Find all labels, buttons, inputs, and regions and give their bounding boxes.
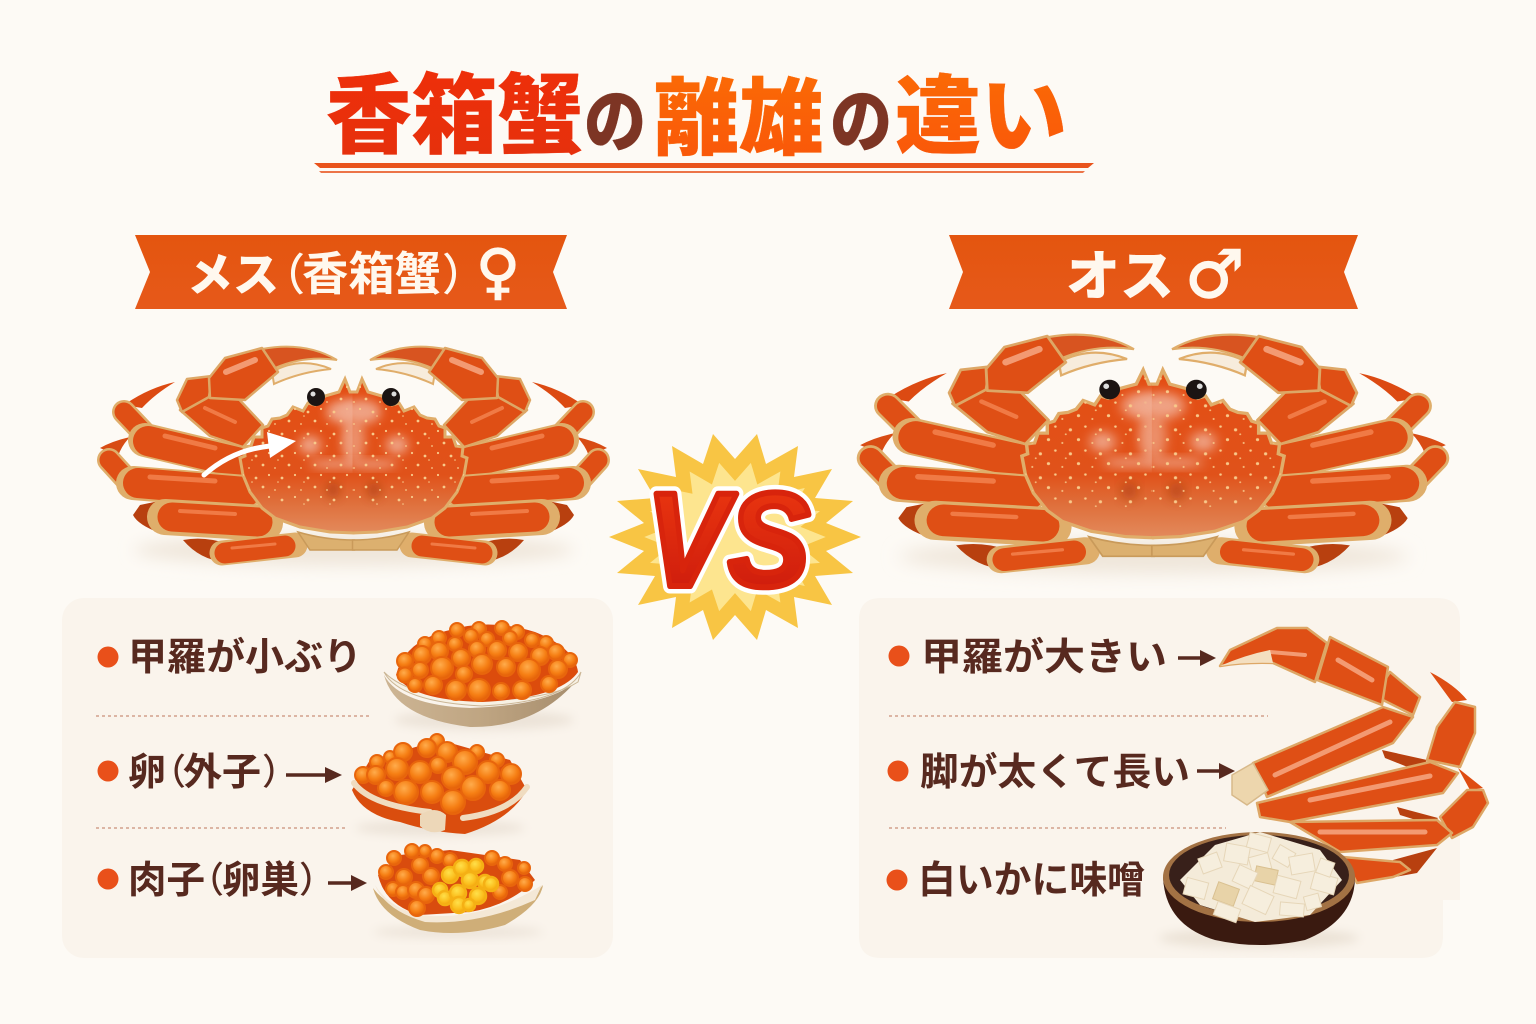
trait: outer eggs: （	[150, 751, 186, 792]
trait: outer eggs: ）	[262, 751, 298, 792]
crab: male	[860, 335, 1446, 574]
food: crab legs and claw	[1220, 628, 1488, 883]
trait: large carapace	[888, 637, 1216, 679]
trait: inner ovary	[98, 859, 367, 902]
food: white miso in bowl	[1159, 832, 1359, 948]
banner: male: ♂	[1185, 236, 1244, 313]
crab: female	[100, 347, 607, 566]
title: 違い	[895, 69, 1067, 165]
banner: female	[135, 235, 567, 309]
arrow: to carapace	[204, 432, 296, 475]
trait: inner ovary: ）	[299, 859, 335, 900]
food: ovary in shell	[373, 844, 543, 938]
banner: female: 香箱蟹	[302, 248, 441, 300]
food: roe in dish	[384, 621, 581, 730]
panel: female traits	[62, 598, 613, 958]
trait: inner ovary: 卵巣	[222, 860, 299, 902]
banner: female: メス	[187, 249, 279, 301]
banner: male: オス	[1066, 247, 1174, 307]
banner: male	[949, 235, 1358, 313]
title: の	[584, 83, 646, 161]
VS starburst	[609, 434, 861, 640]
trait: outer eggs	[98, 751, 342, 794]
title	[314, 68, 1094, 173]
food: outer roe	[352, 734, 527, 836]
title: 離雄	[654, 72, 824, 166]
title: の	[830, 83, 892, 161]
trait: large carapace: 甲羅が大きい	[921, 637, 1167, 679]
trait: long thick legs: 脚が太くて長い	[920, 752, 1190, 794]
trait: small carapace: 甲羅が小ぶり	[128, 637, 362, 679]
trait: inner ovary: 肉子	[128, 860, 205, 902]
banner: female: ♀	[476, 237, 520, 307]
panel: male traits	[859, 598, 1488, 958]
VS starburst: VS	[646, 466, 810, 615]
banner: female: （	[261, 251, 305, 300]
banner: female: ）	[442, 251, 486, 300]
trait: inner ovary: （	[188, 859, 224, 900]
trait: white crab miso: 白いかに味噌	[918, 860, 1145, 902]
trait: outer eggs: 外子	[183, 752, 261, 794]
title: 香箱蟹	[326, 68, 583, 165]
trait: outer eggs: 卵	[128, 752, 166, 794]
VS starburst: VS	[646, 466, 810, 615]
